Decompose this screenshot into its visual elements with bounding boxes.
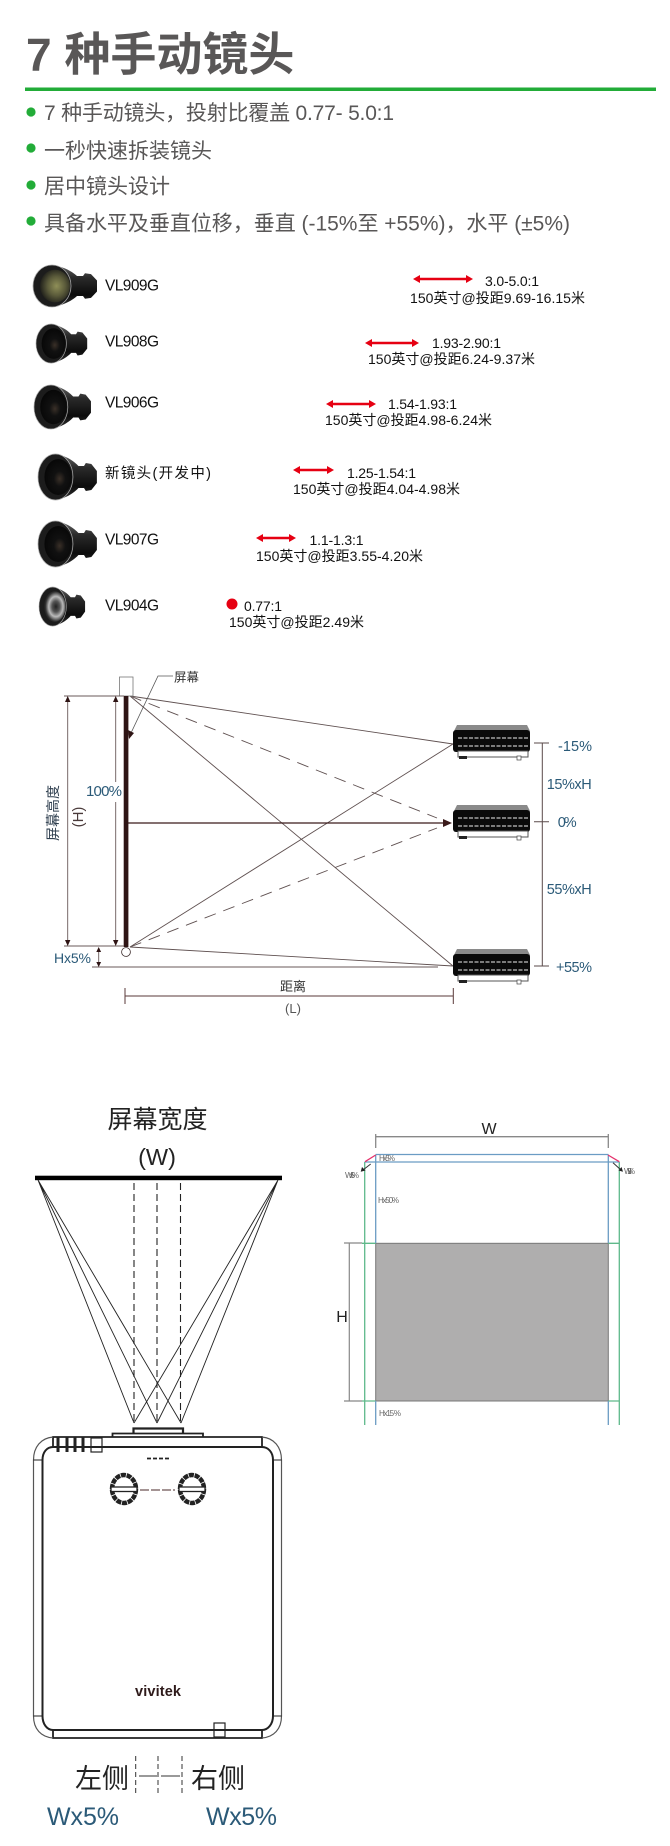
lens row: VL909G: VL909G xyxy=(105,278,159,294)
title underline xyxy=(25,88,656,91)
right side label: 右侧 xyxy=(191,1764,245,1794)
left Wx5 label: Wx5% xyxy=(47,1803,119,1831)
gray screen area xyxy=(376,1243,608,1401)
shift scale xyxy=(534,739,592,976)
lens row: VL909G: 150英寸@投距9.69-16.15米 xyxy=(410,290,585,306)
percent labels: Wx5% xyxy=(345,1171,359,1180)
icon: lens VL908G xyxy=(36,324,87,363)
lens row: VL908G: 150英寸@投距6.24-9.37米 xyxy=(368,351,535,367)
bullet 3: 居中镜头设计 xyxy=(44,176,170,198)
percent labels: Hx50% xyxy=(378,1196,399,1205)
lens shift range diagram xyxy=(336,1121,635,1425)
icon: lens VL906G xyxy=(34,385,91,429)
lens row: VL906G: 150英寸@投距4.98-6.24米 xyxy=(325,412,492,428)
icon: lens VL904G xyxy=(39,587,85,626)
vertical shift diagram xyxy=(45,670,592,1016)
icon: new lens xyxy=(38,454,97,500)
percent labels: Hx5% xyxy=(379,1154,395,1163)
lens row: VL906G xyxy=(34,385,492,429)
width dimension xyxy=(376,1121,608,1148)
screen xyxy=(120,677,133,956)
projector body xyxy=(53,1437,262,1738)
screen width heading: 屏幕宽度 xyxy=(107,1106,208,1134)
percent labels: Hx15 % xyxy=(379,1409,401,1418)
screen bar xyxy=(35,1176,282,1180)
projector top xyxy=(453,725,530,760)
shift arrows xyxy=(361,1163,623,1172)
icon: lens VL907G xyxy=(38,521,97,567)
lens row: VL904G xyxy=(39,587,364,630)
height dimension: H xyxy=(336,1309,348,1326)
H label: (H) xyxy=(70,807,87,827)
horizontal shift diagram xyxy=(34,1106,282,1831)
distance dimension: (L) xyxy=(285,1001,301,1016)
distance dimension: 距离 xyxy=(280,979,306,994)
bullet 1: 7 种手动镜头，投射比覆盖 0.77- 5.0:1 xyxy=(44,102,394,125)
right Wx5 label: Wx5% xyxy=(206,1803,277,1831)
projector bottom xyxy=(453,949,530,984)
screen label xyxy=(128,670,200,739)
lens mount xyxy=(134,1428,183,1433)
dimension arrowheads xyxy=(65,696,118,967)
bullet 4: 具备水平及垂直位移，垂直 (-15%至 +55%)，水平 (±5%) xyxy=(44,212,570,236)
lens row: VL904G: 0.77:1 xyxy=(244,598,282,614)
connector ports xyxy=(58,1437,83,1452)
shift scale: -15% xyxy=(558,739,592,755)
lens row: VL907G xyxy=(38,521,423,567)
distance dimension xyxy=(125,979,453,1016)
lens row: VL907G: VL907G xyxy=(105,532,159,548)
lens row: VL907G: 150英寸@投距3.55-4.20米 xyxy=(256,548,423,564)
lens row: new lens xyxy=(38,454,460,500)
lens chart xyxy=(33,265,585,630)
shift scale: 15%xH xyxy=(547,777,592,793)
lens row: VL906G: 1.54-1.93:1 xyxy=(388,396,457,412)
left side label: 左侧 xyxy=(75,1764,129,1794)
shift scale: +55% xyxy=(556,960,592,976)
ray lines xyxy=(128,696,453,966)
lens row: VL909G: 3.0-5.0:1 xyxy=(485,273,539,289)
icon: lens VL909G xyxy=(33,265,97,307)
lens row: new lens: 150英寸@投距4.04-4.98米 xyxy=(293,481,460,497)
projector top view xyxy=(34,1428,282,1738)
100 percent label: 100% xyxy=(86,783,122,800)
shift ticks xyxy=(136,1756,182,1795)
shift scale: 0% xyxy=(558,815,577,831)
screen label: 屏幕 xyxy=(174,670,200,684)
W heading: (W) xyxy=(138,1144,176,1170)
lens row: VL906G: VL906G xyxy=(105,394,159,412)
screen height label: 屏幕高度 xyxy=(45,785,61,841)
vivitek logo: vivitek xyxy=(135,1684,182,1700)
lens row: VL908G: VL908G xyxy=(105,334,159,350)
lens row: new lens: 新镜头(开发中) xyxy=(105,464,211,482)
Hx5 label: Hx5% xyxy=(54,950,91,966)
bullet 2: 一秒快速拆装镜头 xyxy=(44,140,212,163)
projector middle xyxy=(453,805,530,840)
title: 7 种手动镜头 xyxy=(26,28,294,80)
feature list xyxy=(26,102,570,236)
width dimension: W xyxy=(481,1121,497,1138)
height dimension xyxy=(64,696,438,967)
percent labels xyxy=(345,1154,635,1418)
shift range guide lines xyxy=(362,1154,619,1425)
shift scale: 55%xH xyxy=(547,882,592,898)
projection rays xyxy=(38,1180,278,1423)
lens row: VL907G: 1.1-1.3:1 xyxy=(310,532,364,548)
lens row: VL904G: 150英寸@投距2.49米 xyxy=(229,614,364,630)
percent labels: Wx5% xyxy=(624,1167,635,1176)
lens row: VL904G: VL904G xyxy=(105,598,159,614)
height dimension xyxy=(336,1243,362,1401)
knob pair xyxy=(112,1475,136,1503)
lens row: VL908G xyxy=(36,324,535,367)
lens row: VL909G xyxy=(33,265,585,307)
lens row: new lens: 1.25-1.54:1 xyxy=(347,465,416,481)
lens row: VL908G: 1.93-2.90:1 xyxy=(432,335,501,351)
